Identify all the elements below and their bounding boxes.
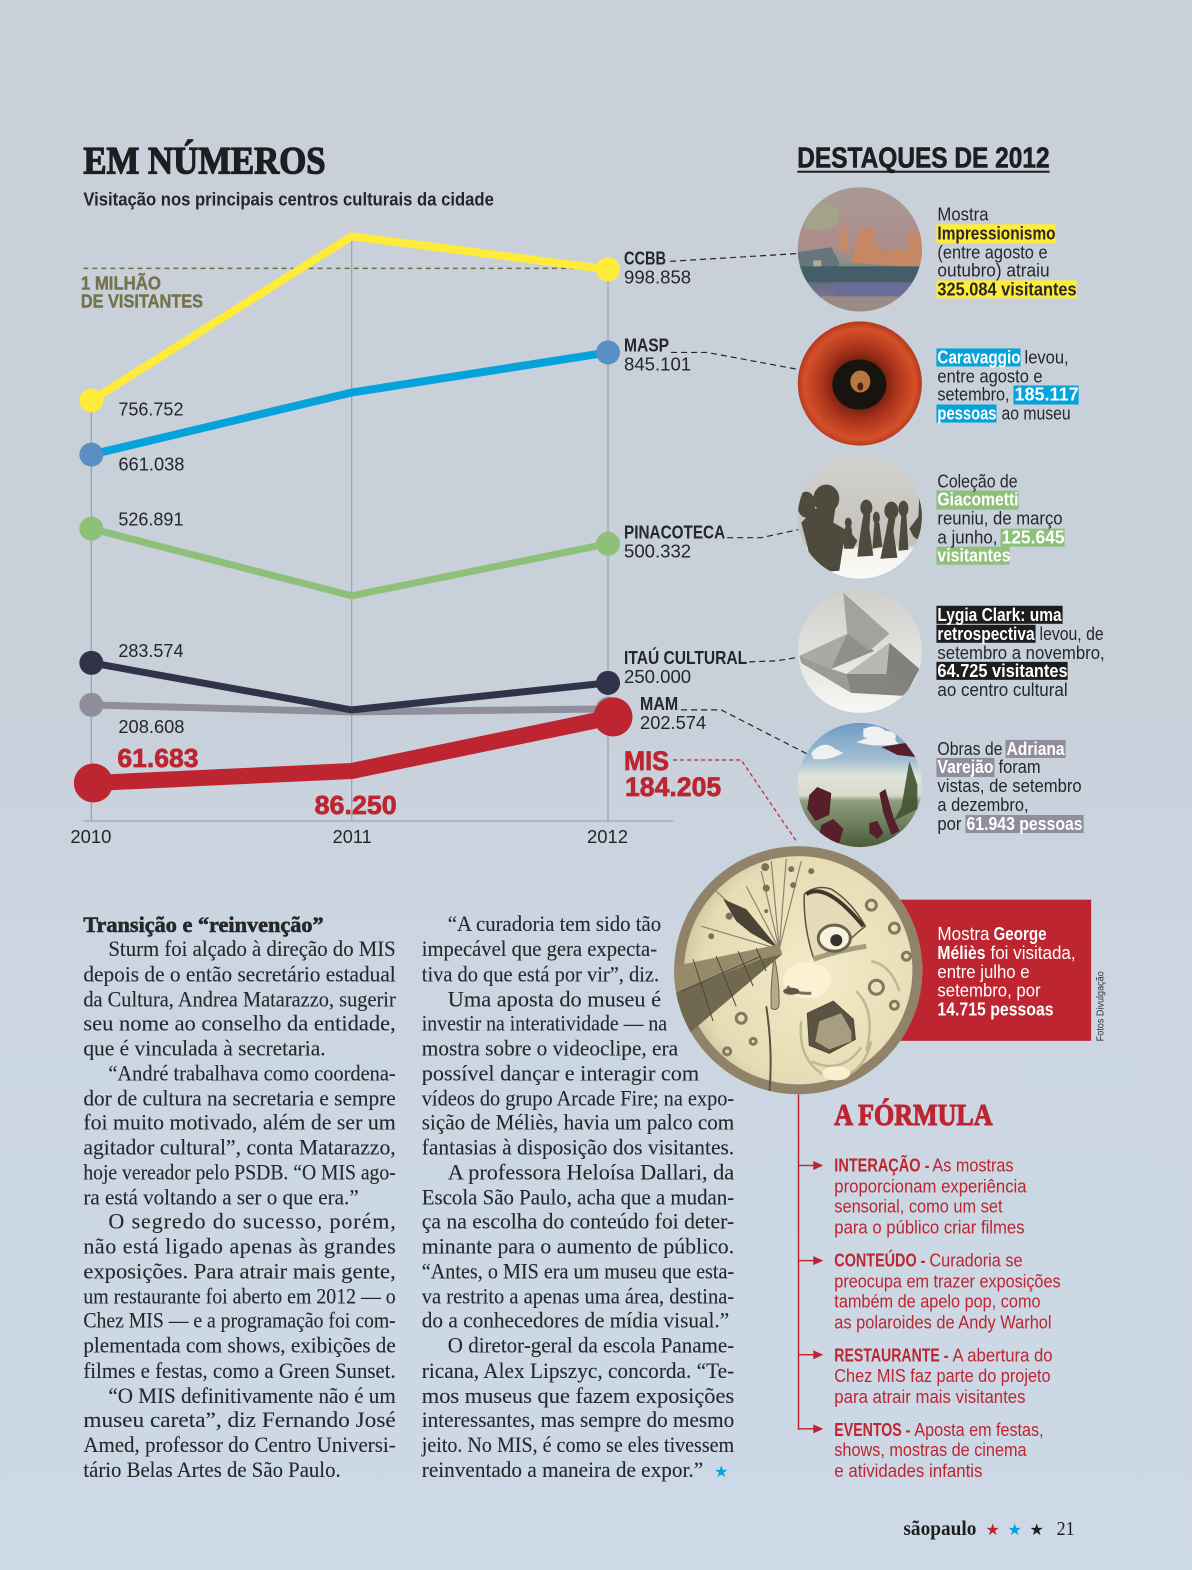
callout: Méliès red box	[891, 900, 1091, 1041]
footer: magazine signature and page number: ★	[1030, 1520, 1044, 1539]
text block: Giacometti: a junho,	[937, 528, 998, 548]
formula list: As mostras	[932, 1155, 1014, 1175]
text block: Impressionismo: outubro) atraiu	[937, 260, 1050, 280]
formula list: para o público criar filmes	[834, 1218, 1025, 1238]
MIS label: MIS	[624, 746, 669, 776]
callout: Méliès red box: Mostra	[937, 924, 990, 944]
text block: Lygia Clark: retrospectiva	[937, 624, 1035, 644]
MIS label	[624, 746, 721, 802]
article column 2: possível dançar e interagir com	[422, 1060, 699, 1085]
article column 1: não está ligado apenas às grandes	[83, 1234, 396, 1259]
text block: Adriana Varejão: Varejão	[937, 757, 994, 777]
series: MAM	[79, 693, 620, 721]
formula list: as polaroides de Andy Warhol	[834, 1313, 1052, 1333]
text block: Impressionismo: Impressionismo	[937, 223, 1056, 243]
years axis	[70, 827, 628, 847]
text block: Adriana Varejão: 61.943 pessoas	[966, 814, 1083, 834]
article column 2: reinventado a maneira de expor.”	[422, 1457, 703, 1482]
series labels 2012: MAM	[640, 694, 678, 714]
article column 2: minante para o aumento de público.	[422, 1234, 734, 1259]
text block: Giacometti: reuniu, de março	[937, 509, 1063, 529]
2010 values: 756.752	[118, 400, 183, 420]
article column 2: vídeos do grupo Arcade Fire; na expo-	[422, 1085, 734, 1110]
MIS values	[117, 743, 397, 820]
article column 1: “André trabalhava como coordena-	[108, 1060, 396, 1085]
article column 2: tiva do que está por vir”, diz.	[422, 961, 659, 986]
article column 1: agitador cultural”, conta Matarazzo,	[83, 1134, 396, 1159]
article column 1: dor de cultura na secretaria e sempre	[83, 1085, 396, 1110]
article column 2: sição de Méliès, havia um palco com	[422, 1109, 734, 1134]
formula list: A abertura do	[952, 1346, 1053, 1366]
callout: Méliès red box: Méliès	[937, 943, 985, 963]
formula list	[834, 1154, 1061, 1481]
text block: Caravaggio: levou,	[1025, 347, 1069, 367]
text block: Giacometti: 125.645	[1002, 528, 1065, 548]
text block: Impressionismo: Mostra	[937, 204, 989, 224]
series: CCBB	[79, 236, 620, 413]
formula list: Chez MIS faz parte do projeto	[834, 1366, 1051, 1386]
article column 1: Amed, professor do Centro Universi-	[83, 1432, 396, 1457]
text block: Giacometti: Coleção de	[937, 472, 1018, 492]
article column 2: A professora Heloísa Dallari, da	[448, 1160, 734, 1185]
callout: Méliès red box: George	[994, 924, 1047, 944]
article column 1: seu nome ao conselho da entidade,	[83, 1010, 396, 1035]
formula list: INTERAÇÃO -	[834, 1154, 929, 1175]
subtitle: Visitação nos principais centros culturais da cidade	[83, 188, 494, 209]
series labels 2012: ITAÚ CULTURAL	[624, 647, 747, 668]
article column 2: jeito. No MIS, é como se eles tivessem	[421, 1432, 734, 1457]
text block: Giacometti	[936, 472, 1065, 566]
text block: Giacometti: visitantes	[937, 546, 1011, 566]
heading: destaques: DESTAQUES DE 2012	[797, 143, 1050, 175]
series labels 2012: PINACOTECA	[624, 523, 725, 543]
text block: Adriana Varejão: foram	[999, 757, 1041, 777]
article column 1: filmes e festas, como a Green Sunset.	[83, 1358, 396, 1383]
text block: Impressionismo	[936, 204, 1077, 299]
article column 1: depois de o então secretário estadual	[83, 961, 396, 986]
formula list: proporcionam experiência	[834, 1177, 1027, 1197]
article column 1: hoje vereador pelo PSDB. “O MIS ago-	[83, 1160, 396, 1185]
formula list: RESTAURANTE -	[834, 1346, 948, 1366]
article column 1: da Cultura, Andrea Matarazzo, sugerir	[83, 986, 396, 1011]
series labels 2012: 845.101	[624, 354, 691, 374]
years axis: 2010	[70, 827, 111, 847]
text block: Caravaggio: entre agosto e	[937, 366, 1043, 386]
article column 2: impecável que gera expecta-	[422, 936, 657, 961]
formula list: shows, mostras de cinema	[834, 1440, 1027, 1460]
article column 1: plementada com shows, exibições de	[83, 1333, 396, 1358]
article column 2: interessantes, mas sempre do mesmo	[422, 1407, 734, 1432]
formula list: e atividades infantis	[834, 1461, 982, 1481]
text block: Adriana Varejão: Adriana	[1007, 739, 1065, 759]
formula list: EVENTOS -	[834, 1420, 910, 1440]
article column 1: O segredo do sucesso, porém,	[108, 1209, 396, 1234]
article column 2: “A curadoria tem sido tão	[448, 911, 661, 936]
footer: magazine signature and page number: sãopaulo	[903, 1516, 976, 1540]
text block: Adriana Varejão: Obras de	[937, 739, 1003, 759]
reference label: 1 milhão: 1 MILHÃO	[81, 272, 161, 293]
text block: Lygia Clark: Lygia Clark: uma	[937, 605, 1062, 625]
article column 2: ★	[714, 1462, 729, 1481]
text block: Adriana Varejão	[936, 739, 1084, 834]
title: EM NÚMEROS	[83, 139, 326, 183]
2010 values	[118, 400, 184, 737]
article column 1: Chez MIS — e a programação foi com-	[83, 1308, 396, 1333]
series: MASP	[79, 340, 620, 467]
MIS values: 86.250	[315, 790, 397, 820]
text block: Impressionismo: (entre agosto e	[937, 242, 1048, 262]
article column 2	[421, 911, 734, 1482]
article column 2: ricana, Alex Lipszyc, concorda. “Te-	[422, 1358, 734, 1383]
series labels 2012: MASP	[624, 335, 669, 355]
series labels 2012: 202.574	[640, 713, 706, 733]
text block: Adriana Varejão: a dezembro,	[937, 795, 1029, 815]
line chart: museum visitors 2010-2012	[70, 236, 747, 847]
image: Méliès moon face	[674, 846, 922, 1094]
article column 2: “Antes, o MIS era um museu que esta-	[422, 1259, 734, 1284]
MIS values: 61.683	[117, 743, 198, 773]
article column 1: “O MIS definitivamente não é um	[108, 1383, 396, 1408]
text block: Giacometti: Giacometti	[937, 490, 1019, 510]
article column 1	[83, 912, 396, 1482]
2010 values: 526.891	[118, 510, 183, 530]
formula list: também de apelo pop, como	[834, 1292, 1041, 1312]
article column 1: Sturm foi alçado à direção do MIS	[108, 936, 396, 961]
text block: Caravaggio: ao museu	[1002, 404, 1071, 424]
text block: Lygia Clark	[936, 605, 1105, 700]
text block: Caravaggio: 185.117	[1015, 385, 1079, 405]
text block: Lygia Clark: 64.725 visitantes	[937, 661, 1068, 681]
text block: Adriana Varejão: vistas, de setembro	[937, 776, 1082, 796]
text block: Caravaggio: setembro,	[937, 385, 1010, 405]
article column 1: que é vinculada à secretaria.	[83, 1035, 326, 1060]
2010 values: 208.608	[118, 717, 184, 737]
text block: Lygia Clark: setembro a novembro,	[937, 643, 1105, 663]
series labels 2012: 998.858	[624, 267, 691, 287]
image: Lygia Clark metal sculpture	[797, 589, 922, 714]
text block: Lygia Clark: levou, de	[1040, 624, 1104, 644]
callout: Méliès red box: entre julho e	[937, 962, 1030, 982]
image: Impressionismo painting	[797, 187, 922, 312]
image: Giacometti sculptures	[797, 455, 922, 580]
article column 2: mostra sobre o videoclipe, era	[422, 1035, 678, 1060]
footer: magazine signature and page number	[903, 1516, 1075, 1540]
text block: Impressionismo: 325.084 visitantes	[937, 279, 1077, 299]
text block: Caravaggio: pessoas	[937, 404, 997, 424]
text block: Caravaggio: Caravaggio	[937, 347, 1021, 367]
text block: Caravaggio	[936, 347, 1079, 424]
years axis: 2011	[333, 827, 372, 847]
article column 2: do a conhecedores de mídia visual.”	[422, 1308, 729, 1333]
MIS label: 184.205	[625, 772, 721, 802]
formula list: preocupa em trazer exposições	[834, 1272, 1061, 1292]
footer: magazine signature and page number: ★	[1008, 1520, 1022, 1539]
formula list: Curadoria se	[929, 1251, 1023, 1271]
formula list: sensorial, como um set	[834, 1197, 1003, 1217]
article column 2: investir na interatividade — na	[422, 1010, 667, 1035]
reference label: 1 milhão	[81, 272, 203, 311]
series labels 2012: CCBB	[624, 248, 666, 268]
photo credit: Fotos Divulgação	[1096, 971, 1107, 1041]
article column 1: museu careta”, diz Fernando José	[83, 1407, 396, 1432]
article column 1: ra está voltando a ser o que era.”	[83, 1185, 359, 1210]
series labels 2012: 250.000	[624, 667, 691, 687]
series: MIS	[74, 697, 633, 803]
article column 2: Uma aposta do museu é	[448, 986, 661, 1011]
formula list: Aposta em festas,	[914, 1420, 1044, 1440]
leader lines from series to highlights	[670, 253, 809, 841]
article column 1: um restaurante foi aberto em 2012 — o	[83, 1284, 396, 1309]
series: Pinacoteca	[79, 517, 620, 596]
text block: Lygia Clark: ao centro cultural	[937, 680, 1068, 700]
series labels 2012: 500.332	[624, 542, 691, 562]
article column 2: mos museus que fazem exposições	[422, 1383, 734, 1408]
article column 1: exposições. Para atrair mais gente,	[83, 1259, 396, 1284]
article column 1: foi muito motivado, além de ser um	[83, 1109, 396, 1134]
text block: Adriana Varejão: por	[937, 814, 961, 834]
callout: Méliès red box: foi visitada,	[991, 943, 1076, 963]
series: Itaú Cultural	[79, 651, 620, 710]
article column 2: O diretor-geral da escola Paname-	[448, 1333, 734, 1358]
article column 2: va restrito a apenas uma área, destina-	[422, 1284, 734, 1309]
series labels 2012	[624, 248, 747, 733]
formula list: para atrair mais visitantes	[834, 1387, 1026, 1407]
image: Caravaggio Medusa shield	[797, 321, 922, 447]
callout: Méliès red box: 14.715 pessoas	[937, 999, 1054, 1019]
article column 1: Transição e “reinvenção”	[83, 912, 324, 937]
article column 2: Escola São Paulo, acha que a mudan-	[422, 1185, 734, 1210]
2010 values: 661.038	[118, 455, 184, 475]
image: Adriana Varejão landscape	[797, 723, 922, 848]
formula list: CONTEÚDO -	[834, 1250, 925, 1271]
article column 2: fantasias à disposição dos visitantes.	[422, 1134, 734, 1159]
article column 2: ça na escolha do conteúdo foi deter-	[422, 1209, 734, 1234]
years axis: 2012	[587, 827, 628, 847]
formula connector arrows	[798, 1094, 823, 1433]
2010 values: 283.574	[118, 641, 183, 661]
article column 1: tário Belas Artes de São Paulo.	[83, 1457, 341, 1482]
heading: A fórmula: A FÓRMULA	[834, 1097, 993, 1132]
reference label: 1 milhão: DE VISITANTES	[81, 291, 203, 311]
callout: Méliès red box: setembro, por	[937, 980, 1041, 1000]
footer: magazine signature and page number: 21	[1057, 1518, 1075, 1540]
footer: magazine signature and page number: ★	[985, 1520, 1000, 1539]
